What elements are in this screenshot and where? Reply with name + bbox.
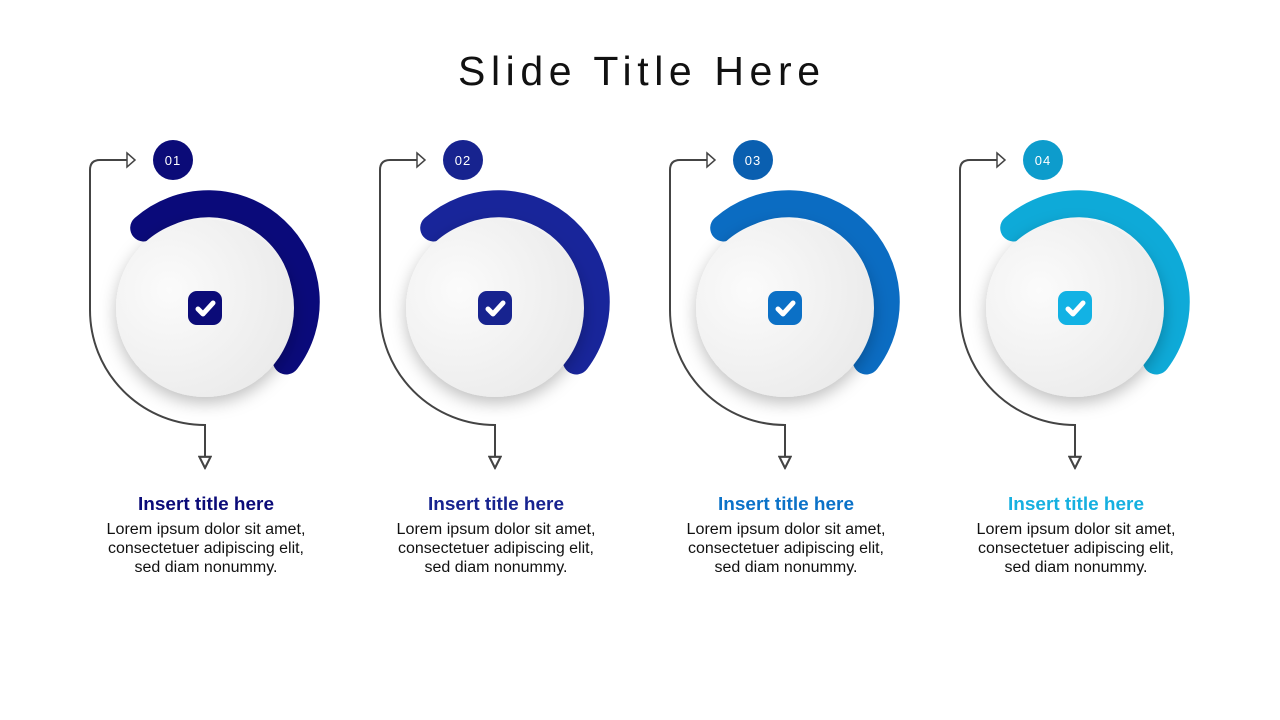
text block 03 (686, 494, 886, 576)
text block 02: Lorem ipsum dolor sit amet, (396, 521, 596, 538)
icon: check 03 (768, 291, 802, 325)
white disc 02 (406, 219, 584, 397)
connector arrow 02 (380, 160, 495, 468)
white disc 01 (116, 219, 294, 397)
number badge 01 (153, 140, 193, 180)
number badge 01: 01 (165, 153, 181, 168)
number badge 03 (733, 140, 773, 180)
white disc 04 (986, 219, 1164, 397)
progress arc 02 (434, 204, 596, 361)
number badge 04 (1023, 140, 1063, 180)
white disc 03 (696, 219, 874, 397)
step 02 (380, 140, 596, 576)
arrowhead top 03 (707, 153, 715, 167)
icon: check 02 (478, 291, 512, 325)
progress arc 01 (144, 204, 306, 361)
text block 04 (976, 494, 1176, 576)
arrowhead top 01 (127, 153, 135, 167)
number badge 02: 02 (455, 153, 471, 168)
arrowhead top 04 (997, 153, 1005, 167)
step 01 (90, 140, 306, 576)
icon: check 01 (188, 291, 222, 325)
text block 01: consectetuer adipiscing elit, (108, 540, 304, 557)
text block 02 (396, 494, 596, 576)
step 04 (960, 140, 1176, 576)
text block 04: Insert title here (1008, 494, 1144, 514)
text block 01 (106, 494, 306, 576)
icon: check 04 (1058, 291, 1092, 325)
text block 01: Insert title here (138, 494, 274, 514)
progress arc 03 (724, 204, 886, 361)
text block 04: Lorem ipsum dolor sit amet, (976, 521, 1176, 538)
number badge 04: 04 (1035, 153, 1051, 168)
text block 04: sed diam nonummy. (1004, 559, 1148, 576)
connector arrow 01 (90, 160, 205, 468)
connector arrow 04 (960, 160, 1075, 468)
text block 03: sed diam nonummy. (714, 559, 858, 576)
text block 03: Lorem ipsum dolor sit amet, (686, 521, 886, 538)
text block 03: Insert title here (718, 494, 854, 514)
step 03 (670, 140, 886, 576)
text block 01: sed diam nonummy. (134, 559, 278, 576)
text block 02: sed diam nonummy. (424, 559, 568, 576)
text block 01: Lorem ipsum dolor sit amet, (106, 521, 306, 538)
text block 02: consectetuer adipiscing elit, (398, 540, 594, 557)
text block 04: consectetuer adipiscing elit, (978, 540, 1174, 557)
title: Slide Title Here (458, 48, 820, 94)
number badge 03: 03 (745, 153, 761, 168)
text block 03: consectetuer adipiscing elit, (688, 540, 884, 557)
progress arc 04 (1014, 204, 1176, 361)
text block 02: Insert title here (428, 494, 564, 514)
number badge 02 (443, 140, 483, 180)
connector arrow 03 (670, 160, 785, 468)
arrowhead top 02 (417, 153, 425, 167)
